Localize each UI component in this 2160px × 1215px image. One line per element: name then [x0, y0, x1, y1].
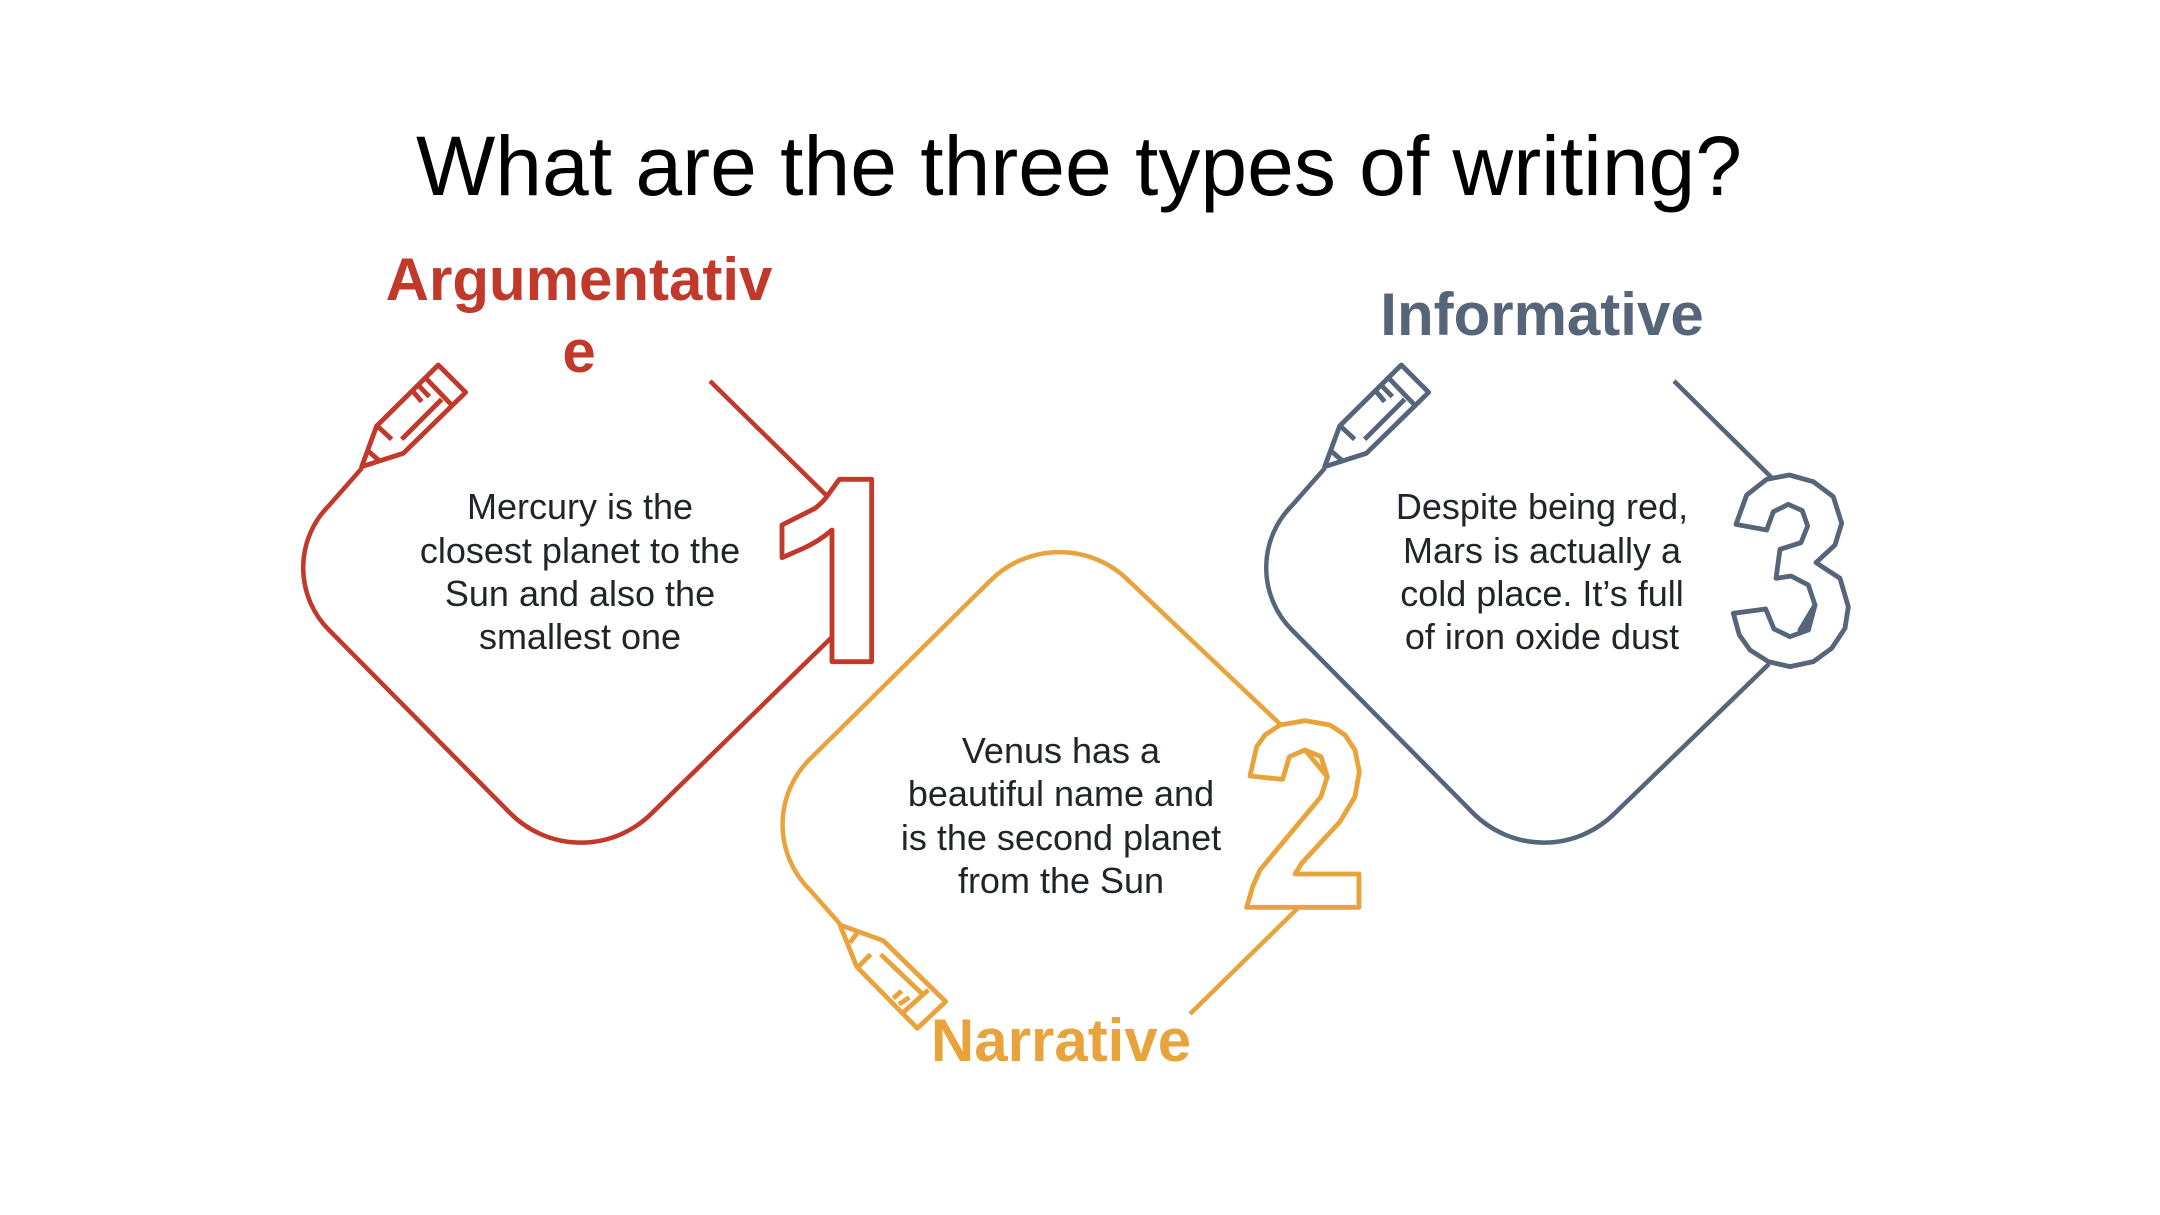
- text: venus: beautiful name and: [908, 773, 1214, 814]
- heading: argumentative: [386, 246, 773, 385]
- text: mars: [1396, 486, 1688, 657]
- panel: informative: [1266, 281, 1848, 843]
- icon: pencil yellow: [840, 925, 946, 1028]
- icon: pencil red: [362, 365, 466, 467]
- text: mercury: smallest one: [479, 616, 681, 657]
- icon: pencil blue: [1325, 365, 1429, 467]
- heading: narrative: Narrative: [931, 1007, 1191, 1074]
- panel: argumentative: [303, 246, 872, 843]
- text: mercury: closest planet to the: [420, 530, 740, 571]
- heading: argumentative: Argumentativ: [386, 246, 773, 313]
- number 2: [1247, 721, 1359, 907]
- diamond outline: informative: [1266, 381, 1772, 843]
- text: mercury: Mercury is the: [467, 486, 693, 527]
- text: mercury: Sun and also the: [445, 573, 715, 614]
- heading: argumentative: e: [562, 318, 596, 385]
- diamond outline: argumentative: [303, 381, 831, 843]
- text: mercury: [420, 486, 740, 657]
- number 1: [782, 479, 872, 662]
- text: mars: of iron oxide dust: [1405, 616, 1679, 657]
- diamond outline: narrative: [783, 552, 1298, 1014]
- text: venus: is the second planet: [901, 817, 1221, 858]
- number 3: [1733, 475, 1848, 667]
- text: venus: [901, 730, 1221, 901]
- title: What are the three types of writing?: [416, 119, 1742, 213]
- text: venus: Venus has a: [962, 730, 1161, 771]
- heading: informative: Informative: [1380, 281, 1704, 348]
- panel: narrative: [783, 552, 1359, 1074]
- text: mars: cold place. It’s full: [1400, 573, 1684, 614]
- text: venus: from the Sun: [958, 860, 1164, 901]
- text: mars: Mars is actually a: [1403, 530, 1682, 571]
- text: mars: Despite being red,: [1396, 486, 1688, 527]
